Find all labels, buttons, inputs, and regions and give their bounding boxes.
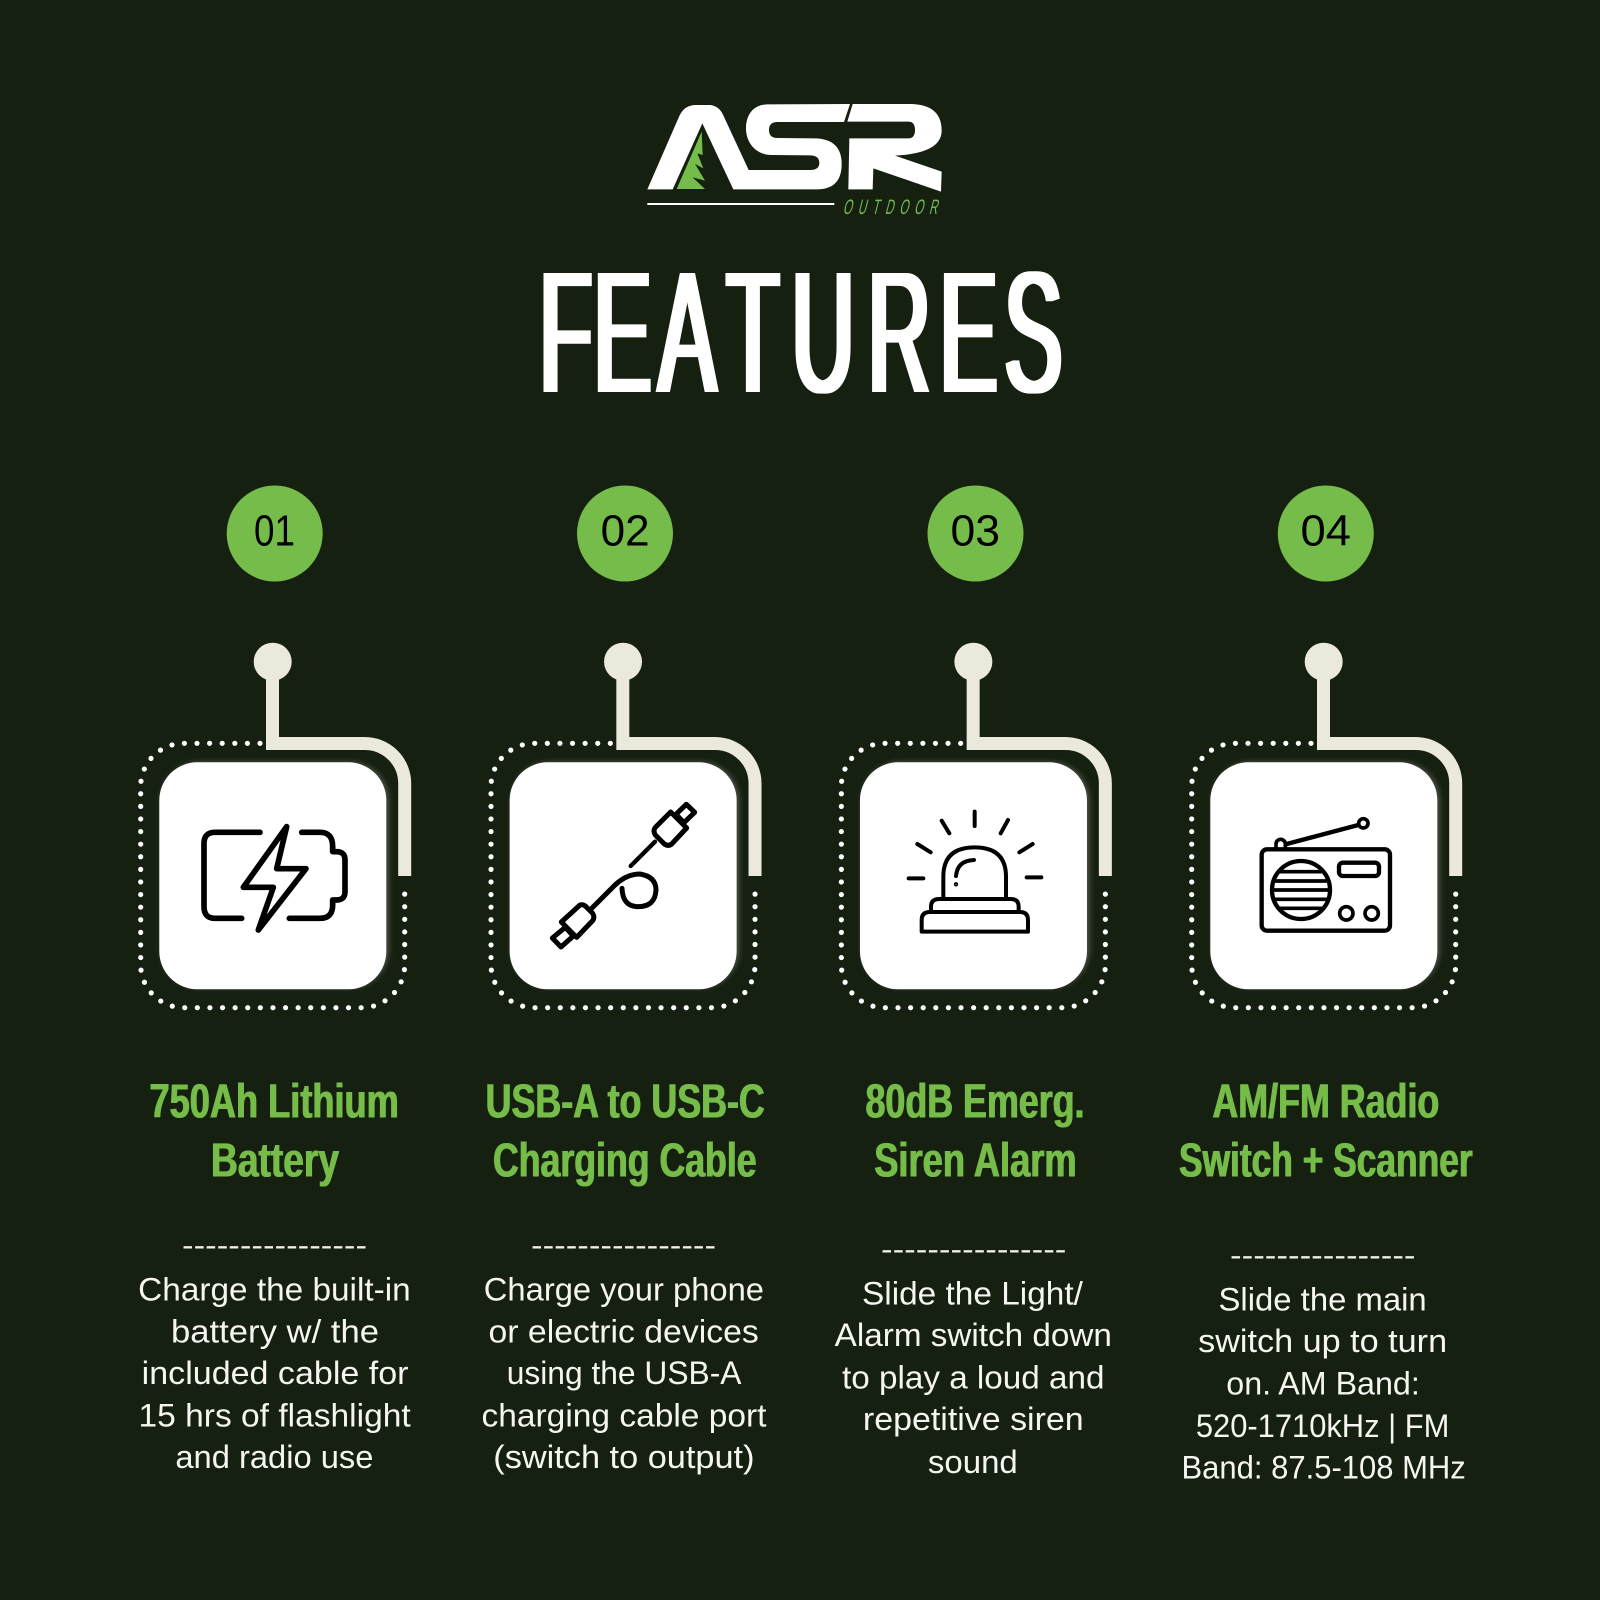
- description: ----------------: [531, 1229, 716, 1262]
- connector and dotted frame: [841, 643, 1105, 1008]
- description: 520-1710kHz | FM: [1196, 1408, 1449, 1444]
- logo tagline: OUTDOOR: [841, 195, 942, 219]
- description: on. AM Band:: [1226, 1366, 1420, 1402]
- heading: 80dB Emerg.: [866, 1075, 1084, 1129]
- number badge 03: [928, 486, 1024, 582]
- description: or electric devices: [488, 1314, 759, 1350]
- connector and dotted frame: [491, 643, 755, 1008]
- icon: battery with lightning bolt: [204, 827, 345, 930]
- column 3: siren: [835, 486, 1112, 1480]
- description: switch up to turn: [1198, 1323, 1447, 1359]
- heading: [1179, 1075, 1473, 1188]
- description: Charge your phone: [484, 1272, 764, 1308]
- description: Alarm switch down: [835, 1317, 1112, 1353]
- description: ----------------: [1230, 1239, 1416, 1272]
- connector and dotted frame: [1192, 643, 1456, 1008]
- description: (switch to output): [493, 1439, 754, 1475]
- number badge 02: 02: [601, 506, 650, 556]
- heading: Siren Alarm: [874, 1134, 1077, 1188]
- number badge 01: 01: [254, 506, 295, 556]
- heading: 750Ah Lithium: [150, 1075, 399, 1129]
- description: ----------------: [182, 1229, 367, 1262]
- heading: Charging Cable: [493, 1134, 757, 1188]
- heading: AM/FM Radio: [1212, 1075, 1439, 1129]
- icon card: [860, 762, 1089, 989]
- description: ----------------: [881, 1233, 1066, 1266]
- description: charging cable port: [482, 1398, 766, 1434]
- description: [835, 1233, 1112, 1480]
- logo letters A and S: [647, 104, 850, 189]
- description: to play a loud and: [842, 1360, 1104, 1396]
- description: [482, 1229, 766, 1475]
- description: Band: 87.5-108 MHz: [1182, 1449, 1466, 1485]
- description: [138, 1229, 411, 1475]
- number badge 02: [577, 486, 673, 582]
- heading: [150, 1075, 399, 1188]
- description: Charge the built-in: [138, 1272, 411, 1308]
- logo letter R: [847, 104, 942, 192]
- description: Slide the Light/: [862, 1275, 1084, 1311]
- number badge 03: 03: [950, 506, 1000, 556]
- number badge 01: [227, 486, 323, 582]
- icon card: [510, 762, 739, 989]
- description: Slide the main: [1218, 1281, 1427, 1317]
- column 4: radio: [1179, 486, 1473, 1485]
- description: 15 hrs of flashlight: [138, 1398, 411, 1434]
- icon card: [1210, 762, 1440, 989]
- icon: radio: [1262, 819, 1390, 931]
- logo underline: [647, 203, 834, 205]
- logo pine tree: [677, 132, 705, 189]
- description: repetitive siren: [863, 1401, 1084, 1437]
- number badge 04: 04: [1300, 506, 1351, 556]
- icon: USB cable: [552, 804, 695, 947]
- heading: USB-A to USB-C: [486, 1075, 765, 1129]
- title: FEATURES: [539, 235, 1062, 429]
- description: included cable for: [142, 1355, 409, 1391]
- column 2: cable: [482, 486, 766, 1475]
- description: and radio use: [175, 1439, 373, 1475]
- description: battery w/ the: [171, 1314, 379, 1350]
- description: using the USB-A: [507, 1355, 742, 1391]
- description: sound: [928, 1444, 1018, 1480]
- heading: [486, 1075, 765, 1188]
- logo: ASR Outdoor: [647, 104, 942, 219]
- number badge 04: [1278, 486, 1374, 582]
- heading: Battery: [211, 1134, 339, 1188]
- description: [1182, 1239, 1466, 1485]
- icon card: [159, 762, 388, 989]
- heading: [866, 1075, 1084, 1188]
- connector and dotted frame: [141, 643, 405, 1008]
- heading: Switch + Scanner: [1179, 1134, 1473, 1188]
- column 1: battery: [138, 486, 411, 1475]
- icon: siren alarm: [909, 812, 1041, 932]
